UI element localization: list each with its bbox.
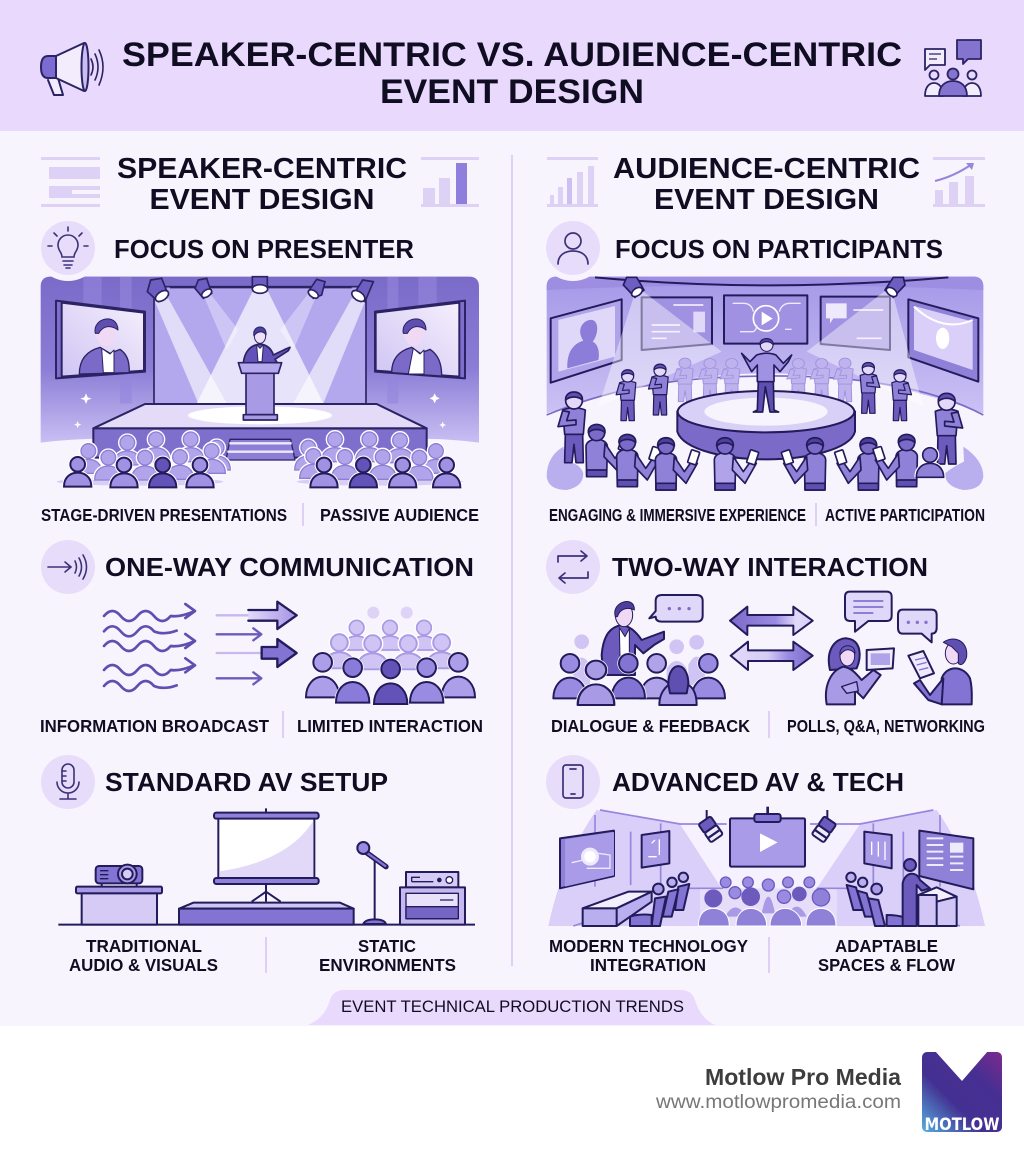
logo: motlow: MOTLOW [924, 1115, 1000, 1135]
audience left [57, 432, 230, 487]
title banner [0, 0, 1024, 131]
section heading: two-way interaction: TWO-WAY INTERACTION [612, 552, 928, 582]
labels: information broadcast and limited interaction [40, 711, 483, 738]
labels: traditional audio and static environments: ENVIRONMENTS [319, 955, 456, 975]
right chairs and presenter [846, 859, 957, 926]
labels: information broadcast and limited interaction: INFORMATION BROADCAST [40, 716, 269, 736]
heading: audience-centric [613, 153, 920, 216]
icon: right bar chart [421, 157, 479, 207]
room walls [548, 810, 985, 926]
footer background [0, 1026, 1024, 1154]
participant with phone [908, 639, 972, 704]
spotlights [598, 277, 923, 407]
wall displays [560, 831, 973, 889]
section heading: focus on participants: FOCUS ON PARTICIPANTS [615, 234, 943, 264]
audio rack [400, 872, 465, 925]
title [122, 36, 902, 111]
labels: information broadcast and limited interaction: LIMITED INTERACTION [297, 716, 483, 736]
mid row participants [558, 362, 963, 464]
icon: left bars [41, 157, 100, 207]
heading: audience-centric: AUDIENCE-CENTRIC [613, 153, 920, 185]
section heading: two-way interaction [546, 540, 928, 594]
title: SPEAKER-CENTRIC VS. AUDIENCE-CENTRIC [122, 36, 902, 74]
labels: engaging experience and active participation: ACTIVE PARTICIPATION [825, 505, 985, 525]
section heading: standard av setup: STANDARD AV SETUP [105, 767, 388, 797]
heading: speaker-centric [117, 153, 407, 216]
section heading: one-way communication [41, 540, 474, 594]
section heading: focus on presenter: FOCUS ON PRESENTER [114, 234, 414, 264]
side lights [698, 810, 836, 843]
heading: audience-centric: EVENT DESIGN [654, 184, 879, 216]
labels: traditional audio and static environments: STATIC [358, 936, 416, 956]
heading: speaker-centric: EVENT DESIGN [150, 184, 374, 216]
corner blobs [547, 447, 583, 490]
illustration: two-way dialogue [553, 592, 972, 705]
central platform [677, 391, 855, 459]
title: EVENT DESIGN [380, 73, 644, 111]
bottom tab: source label: EVENT TECHNICAL PRODUCTION TRENDS [341, 998, 684, 1016]
illustration: presenter on stage [41, 277, 479, 487]
wave lines [104, 604, 195, 691]
labels: dialogue and polls [551, 711, 985, 738]
low riser [179, 903, 354, 925]
illustration: participants around stage [547, 277, 983, 490]
central presenter [742, 338, 792, 412]
speech bubbles: participants [845, 592, 937, 642]
audience right [295, 432, 463, 487]
icon: participant outline [558, 233, 588, 264]
illustration: standard av setup [58, 808, 475, 925]
straight arrows [217, 602, 297, 684]
speech bubble: presenter [649, 595, 703, 622]
labels: traditional audio and static environments: TRADITIONAL [86, 936, 202, 956]
floor line [58, 922, 475, 928]
icon: growth chart with arrow [933, 157, 985, 207]
illustration: advanced av room [548, 807, 985, 926]
icon: smartphone [563, 765, 583, 798]
sparkles [74, 393, 446, 428]
crowd [306, 607, 475, 704]
microphone stand [357, 842, 386, 924]
footer brand text [655, 1064, 901, 1113]
illustration: one-way broadcast [104, 602, 475, 704]
labels: dialogue and polls: POLLS, Q&A, NETWORKING [787, 716, 985, 736]
heading: speaker-centric: SPEAKER-CENTRIC [117, 153, 407, 185]
labels: dialogue and polls: DIALOGUE & FEEDBACK [551, 716, 750, 736]
icon: two-way arrows [558, 551, 588, 583]
projector on table [76, 865, 162, 925]
right side screen [375, 301, 465, 378]
logo: motlow [922, 1051, 1002, 1135]
speaker at podium [238, 327, 290, 420]
icon: audience and chat bubbles [925, 40, 981, 96]
central audience [698, 877, 836, 926]
center divider [511, 155, 513, 966]
labels: modern technology and adaptable spaces: MODERN TECHNOLOGY [549, 936, 748, 956]
footer brand text: Motlow Pro Media [705, 1064, 901, 1090]
labels: modern technology and adaptable spaces: INTEGRATION [590, 955, 706, 975]
panel: speaker-centric [35, 153, 483, 975]
main screen and projector [730, 807, 805, 867]
wall screens [551, 295, 978, 383]
double arrows [730, 607, 813, 670]
labels: modern technology and adaptable spaces: ADAPTABLE [835, 936, 938, 956]
spotlights [147, 277, 373, 304]
icon: one-way signal [48, 555, 86, 579]
section heading: standard av setup [41, 755, 388, 809]
labels: modern technology and adaptable spaces: SPACES & FLOW [818, 955, 955, 975]
front row participants [586, 424, 944, 490]
labels: traditional audio and static environments: AUDIO & VISUALS [69, 955, 218, 975]
labels: stage-driven presentations and passive audience: STAGE-DRIVEN PRESENTATIONS [41, 505, 287, 525]
icon: rising bars [547, 157, 598, 207]
section heading: focus on participants [540, 215, 943, 281]
section heading: one-way communication: ONE-WAY COMMUNICATION [105, 552, 474, 582]
section heading: focus on presenter [35, 215, 414, 281]
presenter and audience [553, 602, 725, 705]
panel: audience-centric [540, 153, 985, 975]
labels: modern technology and adaptable spaces [549, 936, 955, 975]
labels: stage-driven presentations and passive audience [41, 503, 479, 526]
labels: stage-driven presentations and passive audience: PASSIVE AUDIENCE [320, 505, 479, 525]
participant with tablet [826, 638, 894, 704]
stage platform [93, 404, 427, 460]
left side screen [56, 301, 145, 378]
labels: engaging experience and active participation [549, 503, 985, 526]
icon: megaphone [41, 43, 103, 95]
left table and chairs [583, 873, 689, 926]
section heading: advanced av and tech: ADVANCED AV & TECH [612, 767, 904, 797]
icon: light bulb [48, 227, 88, 268]
section heading: advanced av and tech [546, 755, 904, 809]
footer brand text: www.motlowpromedia.com [655, 1092, 901, 1113]
bottom tab: source label [308, 990, 715, 1025]
back row participants [673, 358, 853, 402]
labels: engaging experience and active participation: ENGAGING & IMMERSIVE EXPERIENCE [549, 505, 806, 525]
labels: traditional audio and static environments [69, 936, 456, 975]
icon: microphone [57, 764, 79, 799]
projection screen [214, 808, 319, 902]
